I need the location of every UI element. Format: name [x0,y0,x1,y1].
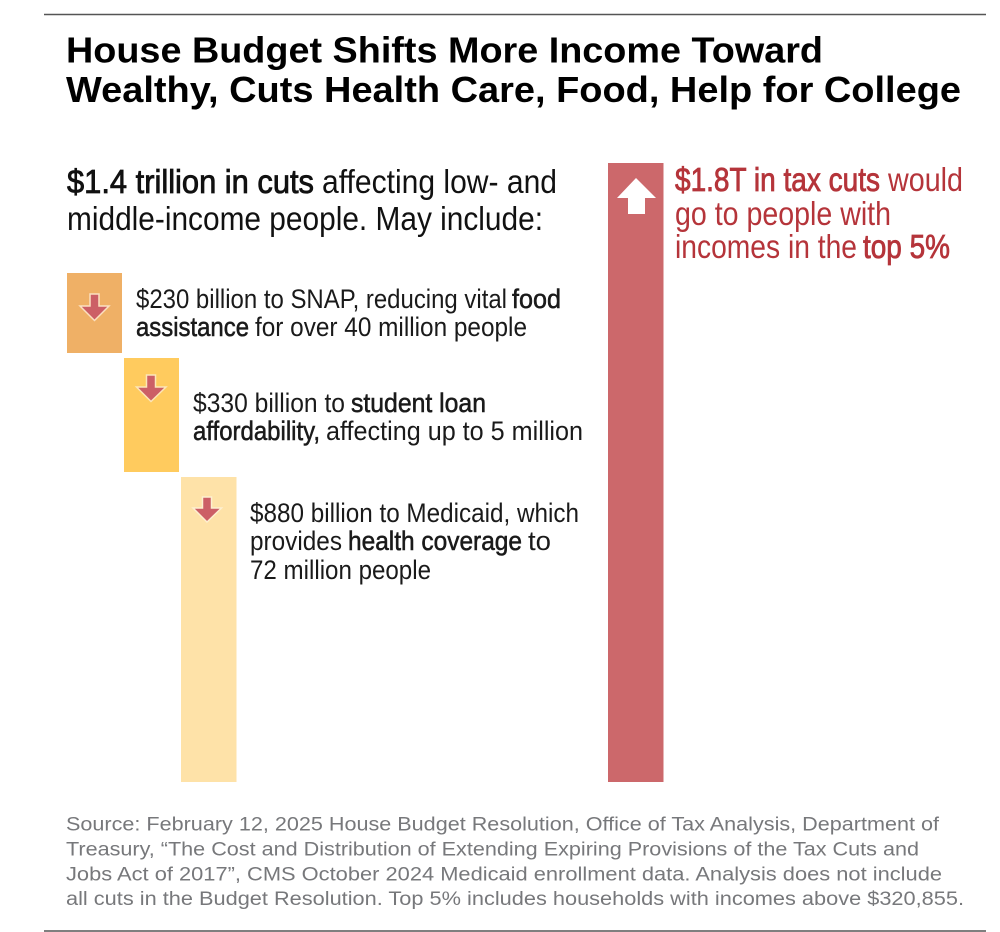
title: Wealthy, Cuts Health Care, Food, Help for College [66,69,961,110]
icon: Medicaid down arrow [193,497,222,522]
source note [66,814,964,910]
text: student loans [193,388,583,446]
text: Medicaid: $880 billion to Medicaid, which [250,498,579,528]
icon: student loan down arrow [136,375,166,402]
bar: SNAP cut [67,273,122,353]
text: tax cuts: top 5% [863,228,950,265]
text: Medicaid: health coverage [348,526,522,556]
text: tax cuts: would [887,161,963,198]
source note: Source: February 12, 2025 House Budget Resolution, Office of Tax Analysis, Department of [66,814,940,836]
text: SNAP: food [512,284,561,314]
text: tax cuts: go to people with [675,195,891,232]
text: tax cuts: incomes in the [675,228,857,265]
source note: Treasury, “The Cost and Distribution of Extending Expiring Provisions of the Tax Cuts and [66,840,919,860]
source note: all cuts in the Budget Resolution. Top 5% includes households with incomes above $320,855. [66,889,964,910]
text: tax cuts: $1.8T in tax cuts [675,161,880,198]
text: SNAP: $230 billion to SNAP, reducing vital [136,284,507,314]
text: Medicaid: 72 million people [250,555,431,585]
text: SNAP [136,284,561,342]
text: student loans: $330 billion to [193,388,345,418]
text: Medicaid [250,498,579,585]
icon: SNAP down arrow [80,294,109,320]
heading: cuts summary [67,163,557,237]
text: student loans: affordability, [193,416,320,446]
source note: Jobs Act of 2017”, CMS October 2024 Medicaid enrollment data. Analysis does not include [66,864,942,886]
heading: cuts summary: affecting low- and [322,163,557,200]
text: SNAP: for over 40 million people [255,312,527,342]
text: student loans: student loan [351,388,486,418]
text: student loans: affecting up to 5 million [326,416,583,446]
text: Medicaid: to [528,526,551,556]
title [66,30,961,110]
text: tax cuts [675,161,963,265]
bar: student loan cut [124,358,179,472]
text: SNAP: assistance [136,312,249,342]
heading: cuts summary: $1.4 trillion in cuts [67,163,314,200]
heading: cuts summary: middle-income people. May include: [67,200,543,237]
icon: up arrow [617,178,656,214]
title: House Budget Shifts More Income Toward [66,30,823,70]
bar: Medicaid cut [181,477,236,782]
bar: tax cuts [608,163,664,782]
text: Medicaid: provides [250,526,342,556]
